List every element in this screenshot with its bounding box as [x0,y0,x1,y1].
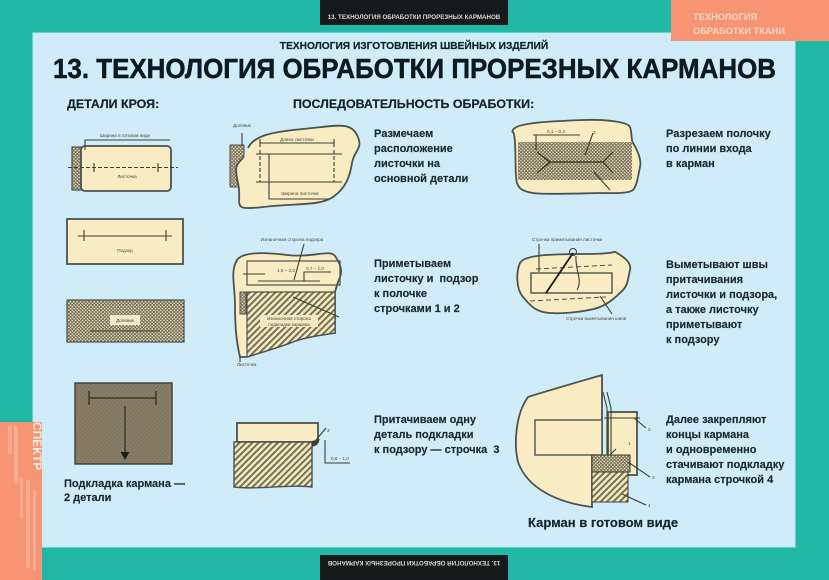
step 1 text: листочки на [374,158,441,170]
step 2 text: Приметываем [374,258,451,270]
series label tab: ОБРАБОТКИ ТКАНИ [693,26,785,36]
diagram: step 3 stitching: 3 [327,428,330,433]
diagram: step 2 basting [233,237,341,367]
step 5 text: а также листочку [666,304,759,316]
step 4 text: в карман [666,158,715,170]
top header tab [320,0,508,25]
diagram: step 2 basting: Изнаночная сторона подзора [261,237,324,242]
caption: pocket lining [64,478,185,504]
step 2 text: строчками 1 и 2 [374,303,460,315]
diagram: step 1 marking: Ширина листочки [281,191,319,196]
diagram: step 1 marking: Долевик [233,123,252,128]
step 5 text: листочки и подзора, [666,289,777,301]
diagram: facing piece: Подзор [117,248,133,253]
series label tab: ТЕХНОЛОГИЯ [693,12,758,22]
step 3 text: к подзору — строчка 3 [374,444,500,456]
step 4 text: по линии входа [666,143,753,155]
diagram: step 2 basting: 0,7 – 1,0 [306,266,324,271]
publisher strip [0,422,44,580]
diagram: step 4 cutting [512,120,640,194]
diagram: finished pocket: 3 [652,475,655,480]
diagram: lengthwise strip: Долевик [116,318,135,323]
heading: sequence: ПОСЛЕДОВАТЕЛЬНОСТЬ ОБРАБОТКИ: [293,97,534,111]
step 2 text: к полочке [374,288,427,300]
step 5 text: приметывают [666,319,743,331]
subtitle: ТЕХНОЛОГИЯ ИЗГОТОВЛЕНИЯ ШВЕЙНЫХ ИЗДЕЛИЙ [280,39,548,52]
diagram: step 1 marking [230,123,359,208]
diagram: facing piece [67,219,183,264]
caption: finished pocket: Карман в готовом виде [528,515,678,530]
step 2 text [374,258,479,315]
diagram: finished pocket: 1 [628,441,631,446]
diagram: step 2 basting: 1,5 – 2,0 [277,268,295,273]
step 6 text: Далее закрепляют [666,414,767,426]
diagram: step 3 stitching [234,423,350,488]
diagram: finished pocket [516,375,655,508]
bottom tab: 13. ТЕХНОЛОГИЯ ОБРАБОТКИ ПРОРЕЗНЫХ КАРМАНОВ [327,559,500,566]
title: 13. ТЕХНОЛОГИЯ ОБРАБОТКИ ПРОРЕЗНЫХ КАРМАНОВ [53,53,776,84]
step 3 text [374,414,500,456]
diagram: pocket welt piece [68,133,178,191]
step 5 text: к подзору [666,334,720,346]
top header tab: 13. ТЕХНОЛОГИЯ ОБРАБОТКИ ПРОРЕЗНЫХ КАРМАНОВ [328,14,501,21]
heading: cut parts: ДЕТАЛИ КРОЯ: [67,97,159,111]
diagram: finished pocket: 4 [648,503,651,508]
diagram: step 2 basting: подкладки кармана [268,322,310,327]
step 6 text: концы кармана [666,429,750,441]
diagram: pocket welt piece: Ширина в готовом виде [100,133,151,138]
step 6 text: кармана строчкой 4 [666,474,774,486]
diagram: step 5 removing stitches: Строчки выметывания швов [566,316,627,321]
step 4 text [666,128,772,170]
step 1 text: основной детали [374,173,468,185]
diagram: pocket lining [75,383,172,464]
diagram: step 2 basting: Изнаночная сторона [267,316,311,321]
caption: pocket lining: 2 детали [64,492,111,504]
step 4 text: Разрезаем полочку [666,128,772,140]
diagram: pocket welt piece: Листочка [117,174,137,179]
step 6 text [666,414,785,486]
step 1 text: расположение [374,143,453,155]
step 6 text: и одновременно [666,444,757,456]
step 2 text: листочку и подзор [374,273,479,285]
diagram: finished pocket: 2 [648,427,651,432]
diagram: step 5 removing stitches [517,237,630,321]
step 3 text: деталь подкладки [374,429,473,441]
publisher strip: СПЕКТР [30,422,44,470]
step 5 text: Выметывают швы [666,259,768,271]
diagram: step 4 cutting: 2 [593,130,596,135]
step 5 text: притачивания [666,274,743,286]
step 1 text: Размечаем [374,128,433,140]
diagram: step 3 stitching: 0,8 – 1,0 [331,456,349,461]
diagram: step 1 marking: Длина листочки [280,137,314,142]
diagram: step 2 basting: Листочка [237,362,257,367]
diagram: lengthwise strip [67,300,184,342]
step 3 text: Притачиваем одну [374,414,477,426]
diagram: step 5 removing stitches: Строчка приметывания листочки [532,237,603,242]
step 1 text [374,128,468,185]
step 5 text [666,259,777,346]
series label tab [671,0,829,41]
diagram: step 4 cutting: 0,1 – 0,2 [547,129,565,134]
caption: pocket lining: Подкладка кармана — [64,478,185,490]
bottom tab [320,555,508,580]
step 6 text: стачивают подкладку [666,459,785,471]
